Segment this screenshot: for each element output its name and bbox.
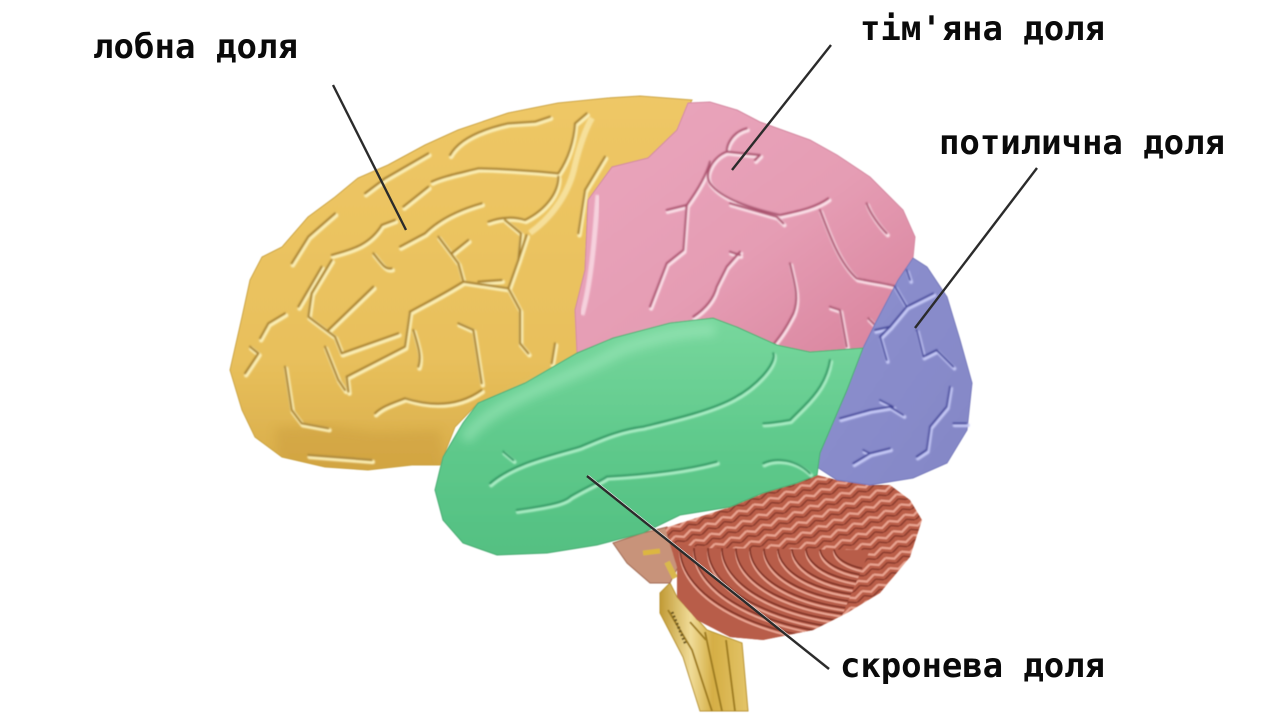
occipital lobe (blue) <box>817 258 972 485</box>
pointer line: parietal lobe <box>732 45 831 170</box>
label: parietal lobe: тім'яна доля <box>860 9 1105 49</box>
frontal lobe (yellow) <box>230 96 692 475</box>
temporal lobe (green) <box>435 318 863 555</box>
label: occipital lobe: потилична доля <box>939 123 1225 163</box>
brain stem and spinal nerves <box>660 583 748 711</box>
pointer line: frontal lobe <box>333 85 406 230</box>
cerebellum <box>660 475 922 655</box>
pointer line: temporal lobe <box>587 476 830 669</box>
pons <box>613 527 678 583</box>
brain illustration <box>230 96 972 711</box>
label: temporal lobe: скронева доля <box>840 646 1105 686</box>
pointer line: occipital lobe <box>915 168 1037 328</box>
label: frontal lobe: лобна доля <box>93 27 298 67</box>
parietal lobe (pink) <box>575 102 915 353</box>
